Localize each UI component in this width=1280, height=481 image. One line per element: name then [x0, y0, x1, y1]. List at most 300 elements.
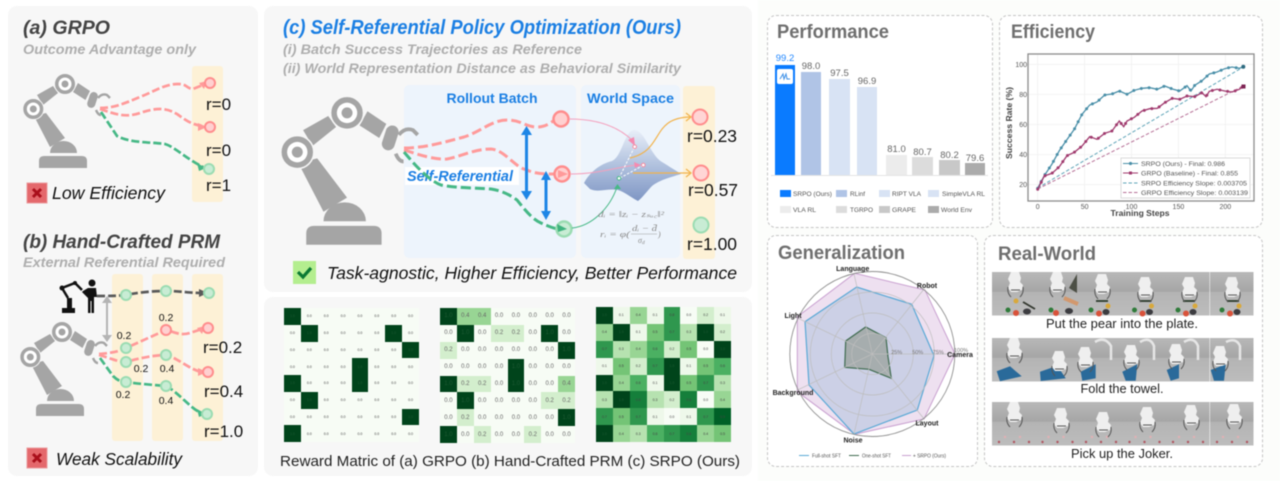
matrix: SRPO: 1.0 [619, 398, 624, 402]
matrix: SRPO: 1.0 [720, 347, 725, 351]
matrix: GRPO: 0.0 [307, 432, 312, 436]
axis tick labels: 60 [1019, 122, 1027, 129]
panel: Efficiency [999, 15, 1263, 228]
legend: VLA RL [793, 207, 816, 214]
formula: ) [657, 230, 661, 239]
subtitle lines [283, 41, 682, 76]
matrix: GRPO [284, 308, 419, 442]
matrix: Hand-Crafted PRM: 1.0 [461, 330, 469, 336]
panel: Rollout Batch [404, 85, 576, 258]
matrix: Hand-Crafted PRM: 0.0 [478, 398, 486, 404]
matrix: SRPO: 0.2 [669, 347, 674, 351]
ring labels: 50% [912, 350, 923, 356]
waypoint values (b): 0.2 [116, 389, 130, 401]
matrix: SRPO: 0.5 [653, 330, 658, 334]
matrix: GRPO: 0.0 [374, 331, 379, 335]
axis labels [773, 266, 973, 444]
axis labels: Background [773, 390, 813, 397]
reward labels (b): r=0.2 [203, 338, 242, 357]
matrix: SRPO: 0.1 [686, 415, 691, 419]
matrix: SRPO: 0.6 [653, 347, 658, 351]
chart legend: SRPO (Ours) - Final: 0.986 [1141, 161, 1225, 168]
icon: robot arm (b) [20, 322, 107, 416]
matrix: GRPO: 0.0 [408, 314, 413, 318]
matrix: GRPO: 0.0 [391, 365, 396, 369]
ring labels: 75% [933, 350, 944, 356]
axis titles: Success Rate (%) [1005, 87, 1014, 159]
matrix: SRPO: 0.1 [653, 381, 658, 385]
verdict: Low Efficiency: Low Efficiency [52, 183, 166, 203]
matrix: SRPO: 0.7 [703, 381, 708, 385]
legend: GRAPE [892, 207, 917, 214]
matrix: GRPO: 0.0 [341, 432, 346, 436]
matrix: SRPO: 1.0 [703, 330, 708, 334]
matrix: Hand-Crafted PRM: 0.0 [512, 347, 520, 353]
axis tick labels: 50 [1081, 204, 1089, 211]
matrix: SRPO: 0.6 [653, 432, 658, 436]
matrix: SRPO: 0.0 [703, 347, 708, 351]
matrix: GRPO: 0.0 [408, 398, 413, 402]
trajectories (a) [100, 81, 207, 171]
matrix: GRPO: 0.0 [324, 348, 329, 352]
legend: TGRPO [850, 207, 873, 214]
matrix: GRPO: 0.0 [341, 331, 346, 335]
matrix: Hand-Crafted PRM: 0.0 [529, 415, 537, 421]
subtitle lines: (ii) World Representation Distance as Behavioral Similarity [283, 60, 682, 76]
matrix: GRPO: 0.0 [374, 432, 379, 436]
subtitle lines: (i) Batch Success Trajectories as Reference [283, 41, 582, 57]
heading: SRPO: (c) Self-Referential Policy Optimization (Ours) [283, 17, 681, 39]
matrix: GRPO: 0.0 [357, 432, 362, 436]
matrix: Hand-Crafted PRM: 0.0 [444, 398, 453, 404]
matrix: SRPO: 0.3 [619, 347, 624, 351]
matrix: SRPO: 0.1 [653, 313, 658, 317]
panel: Generalization [767, 235, 978, 467]
matrix: SRPO: 0.4 [636, 313, 641, 317]
reward column (c) [683, 86, 715, 259]
axis labels: Language [836, 266, 869, 273]
matrix: GRPO: 0.0 [290, 415, 295, 419]
matrix: Hand-Crafted PRM: 0.0 [546, 415, 554, 421]
matrix: Hand-Crafted PRM: 0.0 [444, 330, 453, 336]
panel: Performance [767, 15, 993, 228]
radar chart [790, 272, 955, 436]
matrix: Hand-Crafted PRM: 0.0 [512, 313, 520, 319]
matrix: SRPO: 0.8 [686, 432, 691, 436]
arrows: self-referential distance [521, 126, 551, 220]
matrix: SRPO: 0.1 [619, 313, 624, 317]
matrix: GRPO: 1.0 [290, 381, 295, 385]
formula: dᵢ = ‖zᵢ − zₛᵤ꜀‖² [598, 210, 665, 219]
matrix: SRPO [596, 307, 731, 442]
formula: rᵢ = φ( [600, 230, 632, 239]
icon: robot arm (a) [23, 74, 110, 168]
matrix: GRPO: 0.0 [374, 381, 379, 385]
radar legend: One-shot SFT [862, 454, 892, 460]
matrix: SRPO: 0.7 [669, 330, 674, 334]
matrix: Hand-Crafted PRM: 0.0 [529, 381, 537, 387]
matrix: Hand-Crafted PRM: 0.0 [546, 381, 554, 387]
matrix: GRPO: 0.0 [391, 398, 396, 402]
axis tick labels: 40 [1019, 152, 1027, 159]
matrix: SRPO: 0.3 [720, 381, 725, 385]
matrix: SRPO: 0.2 [669, 398, 674, 402]
matrix: Hand-Crafted PRM: 0.0 [529, 364, 537, 370]
matrix: Hand-Crafted PRM: 0.2 [529, 432, 537, 438]
waypoint values (b): 0.4 [159, 395, 173, 407]
matrix: Hand-Crafted PRM: 0.2 [495, 330, 503, 336]
reward labels (a) [206, 95, 231, 195]
matrix: SRPO: 0.4 [619, 381, 624, 385]
matrix: GRPO: 1.0 [290, 314, 295, 318]
matrix: Hand-Crafted PRM: 0.2 [444, 347, 453, 353]
axis titles [1005, 87, 1170, 218]
reward labels (c): r=1.00 [687, 234, 737, 254]
matrix: Hand-Crafted PRM: 0.0 [512, 415, 520, 421]
axis tick labels: 0 [1036, 204, 1040, 211]
reward labels (a): r=0 [206, 141, 231, 160]
legend: SimpleVLA RL [942, 191, 985, 198]
reward labels (c) [687, 126, 738, 254]
matrix: SRPO: 0.7 [602, 415, 607, 419]
axis labels: Light [784, 313, 802, 320]
matrix: GRPO: 0.0 [324, 365, 329, 369]
matrix: Hand-Crafted PRM: 0.0 [562, 432, 571, 438]
reward labels (a): r=0 [206, 95, 231, 114]
matrix: Hand-Crafted PRM: 1.0 [444, 432, 453, 438]
axis tick labels: 100 [1015, 62, 1027, 69]
trajectories (b) [97, 289, 208, 417]
matrix: Hand-Crafted PRM: 0.0 [478, 415, 486, 421]
matrix: SRPO: 0.0 [686, 313, 691, 317]
panel: GRPO and Hand-Crafted PRM [8, 6, 258, 476]
heading: (b) Hand-Crafted PRM: External Referential Required [23, 254, 225, 270]
matrix: Hand-Crafted PRM: 0.0 [461, 364, 469, 370]
matrix: SRPO: 0.7 [636, 415, 641, 419]
matrix: SRPO: 1.0 [619, 330, 624, 334]
matrix: GRPO: 0.0 [374, 314, 379, 318]
matrix: Hand-Crafted PRM: 0.0 [562, 313, 571, 319]
radar legend [799, 454, 946, 460]
frames: pear task [992, 272, 1254, 316]
caption: reward matrices: Reward Matric of (a) GRPO (b) Hand-Crafted PRM (c) SRPO (Ours) [280, 453, 740, 470]
matrix: SRPO: 0.9 [720, 415, 725, 419]
matrix: GRPO: 0.0 [307, 381, 312, 385]
matrix: GRPO: 0.0 [341, 365, 346, 369]
matrix: SRPO: 0.7 [669, 432, 674, 436]
matrix: GRPO: 0.0 [307, 348, 312, 352]
matrix: SRPO: 0.1 [653, 415, 658, 419]
axis labels: Noise [843, 438, 863, 444]
heading: (a) GRPO [23, 17, 197, 57]
matrix: SRPO: 0.4 [619, 432, 624, 436]
matrix: GRPO: 0.0 [374, 398, 379, 402]
trajectories (c) [404, 119, 558, 229]
matrix: Hand-Crafted PRM: 0.0 [562, 364, 571, 370]
matrix: SRPO: 0.7 [653, 364, 658, 368]
bar values: 96.9 [858, 76, 876, 87]
matrix: GRPO: 0.0 [357, 331, 362, 335]
radar legend: + SRPO (Ours) [913, 454, 946, 460]
panel: Self-Referential Policy Optimization [264, 6, 752, 292]
matrix: SRPO: 0.8 [686, 398, 691, 402]
bar values: 80.7 [913, 147, 932, 158]
matrix: GRPO: 0.0 [290, 365, 295, 369]
matrix: SRPO: 0.5 [619, 364, 624, 368]
matrix: Hand-Crafted PRM: 0.2 [461, 381, 469, 387]
matrix: GRPO: 0.0 [357, 415, 362, 419]
waypoint values (b): 0.4 [160, 363, 174, 375]
icon: check [293, 261, 316, 284]
matrix: GRPO: 1.0 [408, 415, 413, 419]
matrix: Hand-Crafted PRM: 0.0 [546, 364, 554, 370]
label box: Self-Referential: Self-Referential [407, 168, 514, 185]
matrix: SRPO: 0.4 [602, 330, 607, 334]
matrix: Hand-Crafted PRM: 0.0 [546, 313, 554, 319]
heading: Generalization: Generalization [778, 243, 905, 264]
chart legend: SRPO Efficiency Slope: 0.003705 [1141, 180, 1247, 188]
formula: dᵢ − d̄ [632, 224, 658, 233]
heading: (a) GRPO: Outcome Advantage only [23, 41, 197, 57]
heading: Efficiency: Efficiency [1011, 22, 1095, 43]
world-space connectors [569, 113, 691, 228]
matrix: SRPO: 0.3 [653, 398, 658, 402]
matrix: GRPO: 0.0 [357, 348, 362, 352]
matrix: SRPO: 0.5 [619, 415, 624, 419]
axis tick labels: 100 [1126, 204, 1137, 211]
icon: cross (a) [27, 183, 47, 203]
matrix: GRPO: 0.0 [307, 365, 312, 369]
matrix: Hand-Crafted PRM: 0.4 [461, 313, 469, 319]
matrix: Hand-Crafted PRM: 0.0 [529, 398, 537, 404]
formula: d [642, 240, 645, 246]
matrix: SRPO: 0.7 [703, 415, 708, 419]
matrix: GRPO: 0.0 [324, 314, 329, 318]
matrix: GRPO: 0.0 [290, 331, 295, 335]
reward column (a) [192, 66, 223, 202]
bar values: 97.5 [830, 68, 849, 79]
matrix: SRPO: 0.3 [686, 330, 691, 334]
matrix: GRPO: 0.0 [374, 348, 379, 352]
matrix: GRPO: 0.0 [324, 415, 329, 419]
matrix: SRPO: 0.2 [703, 313, 708, 317]
matrix: GRPO: 0.0 [307, 415, 312, 419]
reward labels (b): r=0.4 [204, 382, 243, 401]
heading: (a) GRPO: (a) GRPO [23, 17, 110, 39]
matrix: Hand-Crafted PRM: 0.0 [546, 432, 554, 438]
matrix: SRPO: 1.0 [602, 432, 607, 436]
matrix: Hand-Crafted PRM: 0.2 [478, 381, 486, 387]
matrix: Hand-Crafted PRM [440, 308, 575, 443]
waypoint values (b): 0.2 [134, 363, 148, 375]
matrix: SRPO: 0.1 [686, 364, 691, 368]
reward nodes (c) [692, 110, 708, 232]
matrix: Hand-Crafted PRM: 0.0 [478, 347, 486, 353]
matrix: SRPO: 0.5 [720, 432, 725, 436]
heading: (b) Hand-Crafted PRM: (b) Hand-Crafted PRM [23, 231, 221, 253]
axis tick labels: 20 [1019, 182, 1027, 189]
legend: RIPT VLA [892, 191, 922, 198]
matrix: Hand-Crafted PRM: 0.4 [478, 313, 486, 319]
matrix: GRPO: 0.0 [324, 398, 329, 402]
matrix: GRPO: 0.0 [290, 398, 295, 402]
heading: Performance: Performance [777, 22, 889, 43]
reward labels (c): r=0.57 [688, 180, 738, 200]
matrix: SRPO: 1.0 [602, 381, 607, 385]
matrix: GRPO: 0.0 [290, 348, 295, 352]
matrix: Hand-Crafted PRM: 1.0 [562, 415, 571, 421]
matrix: SRPO: 0.5 [686, 347, 691, 351]
matrix: Hand-Crafted PRM: 0.0 [529, 313, 537, 319]
matrix: SRPO: 0.5 [686, 381, 691, 385]
matrix: SRPO: 0.6 [720, 364, 725, 368]
verdict: Weak Scalability: Weak Scalability [56, 449, 183, 469]
matrix: SRPO: 0.4 [636, 347, 641, 351]
matrix: Hand-Crafted PRM: 0.0 [444, 364, 453, 370]
reward labels (b) [203, 338, 243, 441]
axis titles: Training Steps [1110, 209, 1170, 218]
matrix: GRPO: 0.0 [341, 314, 346, 318]
panel: reward matrices [264, 297, 752, 476]
bar chart [771, 53, 988, 176]
matrix: SRPO: 0.3 [636, 432, 641, 436]
matrix: Hand-Crafted PRM: 0.0 [512, 432, 520, 438]
bar values: 81.0 [887, 144, 906, 155]
matrix: Hand-Crafted PRM: 0.0 [478, 330, 486, 336]
caption: joker task: Pick up the Joker. [1071, 447, 1173, 461]
outcome nodes (c) [554, 112, 572, 236]
chart legend: GRPO (Baseline) - Final: 0.855 [1141, 170, 1238, 178]
heading: Real-World: Real-World [998, 244, 1096, 265]
matrix: GRPO: 0.0 [341, 348, 346, 352]
caption: pear task: Put the pear into the plate. [1046, 317, 1198, 331]
matrix: SRPO: 0.1 [720, 313, 725, 317]
panel: Real-World [984, 235, 1263, 467]
frames: joker task [992, 402, 1254, 446]
waypoint values (b) [116, 312, 174, 407]
panel: World Space: World Space [587, 90, 674, 106]
matrix: SRPO: 0.5 [703, 364, 708, 368]
matrix: Hand-Crafted PRM: 0.2 [478, 432, 486, 438]
matrix: Hand-Crafted PRM: 0.0 [495, 381, 503, 387]
axis tick labels: 200 [1219, 204, 1231, 211]
matrix: GRPO: 0.0 [408, 381, 413, 385]
radar legend: Full-shot SFT [812, 454, 842, 460]
ring labels [891, 348, 968, 356]
formula: σ [638, 236, 642, 245]
matrix: Hand-Crafted PRM: 0.2 [546, 398, 554, 404]
matrix: GRPO: 1.0 [391, 331, 396, 335]
matrix: GRPO: 1.0 [307, 398, 312, 402]
matrix: Hand-Crafted PRM: 1.0 [461, 398, 469, 404]
matrix: SRPO: 0.1 [636, 330, 641, 334]
matrix: SRPO: 0.3 [602, 398, 607, 402]
formula [598, 210, 665, 246]
matrix: GRPO: 1.0 [290, 432, 295, 436]
bar values: 98.0 [802, 61, 820, 72]
icon: human demonstrator [60, 280, 97, 313]
world-space surface [584, 130, 681, 201]
right side backdrop [758, 0, 1280, 481]
bar values: 79.6 [966, 153, 984, 164]
chart legend: GRPO Efficiency Slope: 0.003139 [1141, 190, 1248, 197]
frames: towel task [992, 338, 1254, 382]
legend: RLinf [850, 191, 865, 198]
axis tick labels: 150 [1173, 204, 1184, 211]
arrow: external reference gap [102, 296, 112, 342]
matrix: Hand-Crafted PRM: 0.0 [495, 415, 503, 421]
axis labels: Layout [916, 420, 939, 428]
matrix: GRPO: 0.0 [408, 432, 413, 436]
matrix: Hand-Crafted PRM: 0.0 [529, 330, 537, 336]
bar values: 99.2 [776, 53, 794, 64]
matrix: GRPO: 0.0 [374, 415, 379, 419]
matrix: GRPO: 0.0 [341, 398, 346, 402]
matrix: GRPO: 0.0 [408, 365, 413, 369]
legend: World Env [941, 207, 973, 214]
line chart [1028, 54, 1254, 201]
panel: Rollout Batch: Rollout Batch [446, 90, 538, 106]
matrix: GRPO: 0.0 [341, 415, 346, 419]
matrix: Hand-Crafted PRM: 1.0 [512, 381, 520, 387]
reward labels (a): r=1 [206, 176, 231, 195]
legend [780, 190, 985, 214]
matrix: SRPO: 0.4 [720, 398, 725, 402]
legend: SRPO (Ours) [793, 191, 832, 198]
reward labels (c): r=0.23 [687, 126, 737, 146]
matrix: GRPO: 0.0 [408, 331, 413, 335]
matrix: Hand-Crafted PRM: 1.0 [512, 364, 520, 370]
matrix: SRPO: 0.6 [636, 381, 641, 385]
waypoint values (b): 0.2 [159, 312, 173, 324]
axis tick labels: 80 [1019, 92, 1027, 99]
matrix: GRPO: 0.0 [357, 314, 362, 318]
ring labels: 25% [891, 350, 902, 356]
matrix: Hand-Crafted PRM: 0.0 [461, 347, 469, 353]
axis tick labels [1015, 62, 1231, 211]
matrix: SRPO: 0.0 [703, 398, 708, 402]
matrix: GRPO: 0.0 [391, 314, 396, 318]
matrix: Hand-Crafted PRM: 0.0 [495, 313, 503, 319]
matrix: Hand-Crafted PRM: 1.0 [444, 313, 453, 319]
matrix: SRPO: 1.0 [669, 381, 674, 385]
matrix: SRPO: 0.2 [636, 364, 641, 368]
reward labels (b): r=1.0 [204, 422, 243, 441]
matrix: Hand-Crafted PRM: 0.0 [512, 398, 520, 404]
matrix: SRPO: 0.2 [720, 330, 725, 334]
matrix: SRPO: 1.0 [669, 364, 674, 368]
bar values [776, 53, 984, 164]
ring labels: 100% [954, 348, 968, 354]
matrix: GRPO: 0.0 [324, 381, 329, 385]
matrix: GRPO: 0.0 [391, 381, 396, 385]
outcome nodes (a) [204, 78, 215, 174]
icon: bar badge [777, 69, 793, 84]
matrix: GRPO: 0.0 [307, 314, 312, 318]
matrix: GRPO: 0.0 [391, 432, 396, 436]
matrix: Hand-Crafted PRM: 0.2 [461, 415, 469, 421]
panel: World Space [581, 85, 680, 258]
caption: towel task: Fold the towel. [1080, 382, 1164, 396]
matrix: Hand-Crafted PRM: 0.2 [562, 398, 571, 404]
matrix: GRPO: 1.0 [408, 348, 413, 352]
matrix: Hand-Crafted PRM: 0.0 [444, 415, 453, 421]
matrix: SRPO: 0.1 [602, 364, 607, 368]
matrix: SRPO: 0.8 [669, 313, 674, 317]
matrix: Hand-Crafted PRM: 0.0 [495, 398, 503, 404]
matrix: Hand-Crafted PRM: 0.0 [461, 432, 469, 438]
matrix: SRPO: 0.8 [636, 398, 641, 402]
